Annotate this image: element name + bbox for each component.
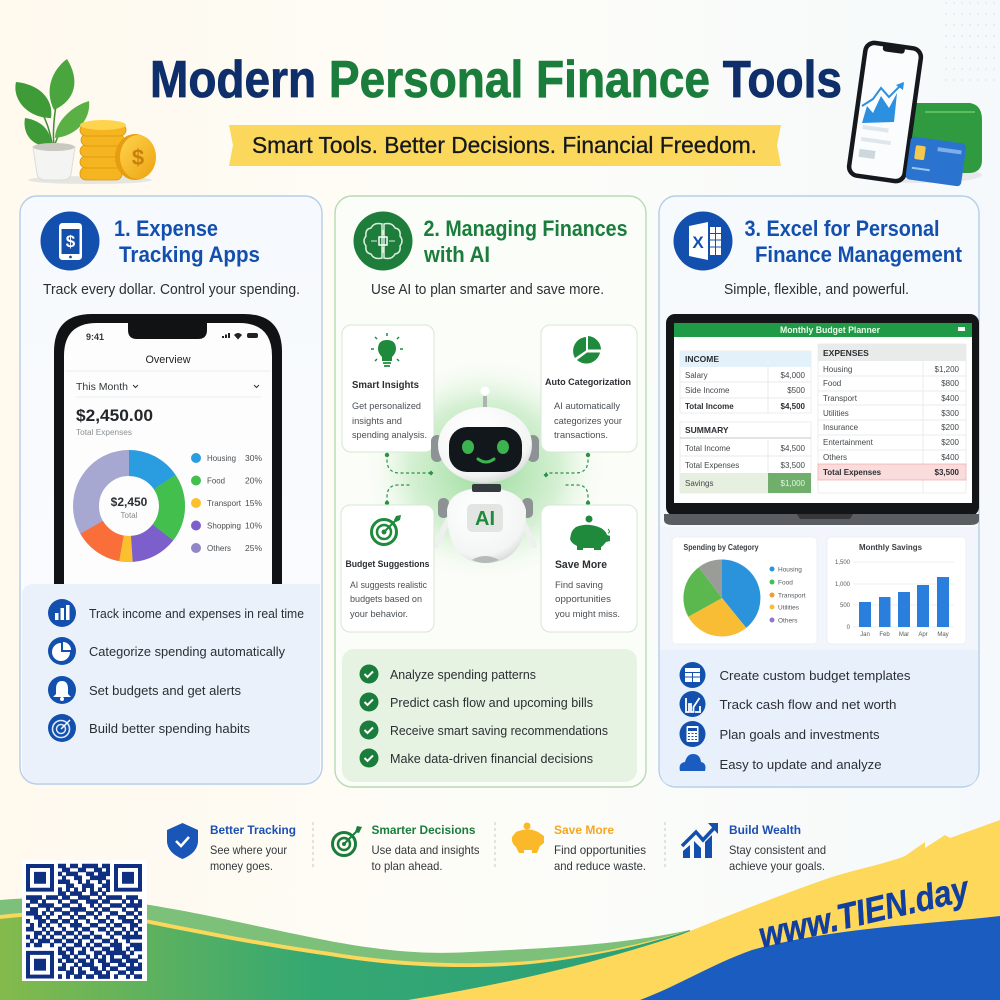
panel 2 heading: 2. Managing Finances bbox=[424, 216, 628, 241]
donut legend: Transport bbox=[207, 498, 242, 508]
benefit: build wealth: achieve your goals. bbox=[729, 859, 825, 873]
panel 1 heading: Tracking Apps bbox=[119, 242, 260, 267]
phone mockup bbox=[54, 314, 282, 584]
panel 1 feature list bbox=[22, 584, 320, 783]
phone mockup: Total Expenses bbox=[76, 428, 132, 437]
benefit: save more bbox=[512, 822, 646, 873]
expenses table: $1,200 bbox=[935, 365, 960, 374]
panel 1 feature list: Categorize spending automatically bbox=[89, 644, 285, 659]
panel 3 feature list: Track cash flow and net worth bbox=[720, 697, 896, 712]
panel 2: managing finances with AI bbox=[335, 196, 646, 787]
card: budget suggestions: Budget Suggestions bbox=[346, 559, 430, 570]
benefit: smarter decisions: to plan ahead. bbox=[372, 859, 442, 873]
icon: light bulb bbox=[371, 333, 403, 366]
benefit: better tracking: money goes. bbox=[210, 859, 273, 873]
icon: table bbox=[680, 662, 706, 688]
panel 2 feature list: Predict cash flow and upcoming bills bbox=[390, 696, 593, 710]
bar chart card: monthly savings: Jan bbox=[860, 632, 870, 638]
card: budget suggestions bbox=[341, 505, 434, 632]
card: save more bbox=[541, 505, 637, 632]
panel 2 feature list: Receive smart saving recommendations bbox=[390, 724, 608, 738]
robot bbox=[431, 386, 539, 563]
illustration: plant and coins bbox=[15, 59, 156, 184]
phone mockup: $2,450.00 bbox=[76, 406, 153, 425]
income table: $4,000 bbox=[781, 371, 806, 380]
illustration: phone, wallet and card bbox=[848, 42, 982, 187]
income table: $500 bbox=[787, 386, 806, 395]
panel 1 subtitle: Track every dollar. Control your spending. bbox=[43, 282, 300, 298]
card: auto categorization: categorizes your bbox=[554, 416, 622, 427]
bar chart card: monthly savings: 0 bbox=[847, 625, 851, 631]
donut legend: Housing bbox=[207, 453, 236, 463]
icon: target bbox=[332, 826, 362, 856]
panel 1 feature list: Set budgets and get alerts bbox=[89, 683, 241, 698]
donut legend: Shopping bbox=[207, 520, 241, 530]
icon: bar chart bbox=[48, 599, 76, 627]
benefit: save more: Save More bbox=[554, 823, 614, 837]
expenses table: $200 bbox=[941, 423, 960, 432]
card: smart insights bbox=[342, 325, 434, 452]
card: budget suggestions: your behavior. bbox=[350, 609, 408, 620]
panel 2 feature list bbox=[342, 649, 637, 782]
icon: pie chart bbox=[573, 336, 601, 364]
phone mockup: Overview bbox=[146, 354, 191, 366]
donut chart bbox=[86, 463, 172, 549]
summary table: SUMMARY bbox=[685, 425, 729, 435]
panel 1 feature list: Build better spending habits bbox=[89, 721, 250, 736]
website url: www.TIEN.day bbox=[755, 867, 974, 956]
expenses table: Housing bbox=[823, 365, 852, 374]
income table: Salary bbox=[685, 371, 708, 380]
benefit: save more: and reduce waste. bbox=[554, 859, 646, 873]
pie chart card: spending by category bbox=[672, 537, 817, 644]
bar chart card: monthly savings: Apr bbox=[918, 632, 928, 638]
icon: shield bbox=[167, 823, 198, 859]
panel 2 icon: AI brain bbox=[354, 212, 412, 270]
panel 1 icon: phone with dollar bbox=[40, 212, 100, 270]
expenses table bbox=[818, 344, 966, 493]
donut legend: 20% bbox=[245, 476, 262, 486]
benefit: better tracking bbox=[167, 823, 296, 873]
summary table: Total Expenses bbox=[685, 461, 739, 470]
laptop with budget spreadsheet bbox=[664, 314, 979, 525]
expenses table: Food bbox=[823, 379, 841, 388]
card: save more: opportunities bbox=[555, 594, 611, 605]
expenses table: $800 bbox=[941, 379, 960, 388]
income table: Total Income bbox=[685, 402, 734, 411]
summary table: Savings bbox=[685, 479, 713, 488]
panel 3 heading bbox=[744, 216, 963, 267]
benefit: build wealth: Build Wealth bbox=[729, 823, 801, 837]
icon: target bbox=[48, 714, 76, 742]
panel 2 feature list: Analyze spending patterns bbox=[390, 668, 536, 682]
income table: $4,500 bbox=[781, 402, 806, 411]
panel 3: excel for personal finance bbox=[659, 196, 979, 787]
panel 2 heading: with AI bbox=[423, 242, 490, 267]
expenses table: EXPENSES bbox=[823, 348, 869, 358]
expenses table: Entertainment bbox=[823, 438, 874, 447]
bar chart card: monthly savings: Monthly Savings bbox=[859, 542, 922, 552]
icon: piggy bank bbox=[512, 822, 544, 853]
panel 3 subtitle: Simple, flexible, and powerful. bbox=[724, 282, 909, 298]
panel 1 heading bbox=[114, 216, 260, 267]
donut legend: 30% bbox=[245, 453, 262, 463]
card: save more: Find saving bbox=[555, 580, 603, 591]
bar chart card: monthly savings bbox=[827, 537, 966, 644]
panel 1: expense tracking apps bbox=[20, 196, 322, 784]
panel 1 heading: 1. Expense bbox=[114, 216, 218, 241]
expenses table: Utilities bbox=[823, 409, 849, 418]
donut legend: Food bbox=[207, 476, 225, 486]
pie chart card: spending by category: Housing bbox=[778, 566, 802, 574]
phone mockup: 9:41 bbox=[86, 332, 104, 342]
panel 3 heading: Finance Management bbox=[755, 242, 963, 267]
phone mockup: $2,450 bbox=[111, 495, 148, 509]
benefit: smarter decisions: Use data and insights bbox=[372, 843, 480, 857]
card: auto categorization: AI automatically bbox=[554, 401, 620, 412]
connector lines bbox=[385, 453, 590, 505]
summary table: $1,000 bbox=[781, 479, 806, 488]
expenses table: $400 bbox=[941, 453, 960, 462]
card: budget suggestions: budgets based on bbox=[350, 594, 422, 605]
panel 2 feature list: Make data-driven financial decisions bbox=[390, 752, 593, 766]
donut legend: 25% bbox=[245, 543, 262, 553]
card: smart insights: insights and bbox=[352, 416, 402, 427]
pie chart card: spending by category: Spending by Category bbox=[684, 543, 759, 552]
icon: pie bbox=[48, 637, 76, 665]
benefit: smarter decisions bbox=[332, 823, 480, 873]
card: smart insights: Get personalized bbox=[352, 401, 421, 412]
icon: target bbox=[372, 515, 401, 544]
expenses table: $400 bbox=[941, 394, 960, 403]
illustration: plant and coins: $ bbox=[132, 145, 144, 170]
benefit: build wealth bbox=[682, 823, 826, 873]
benefit: better tracking: Better Tracking bbox=[210, 823, 296, 837]
card: save more: Save More bbox=[555, 559, 607, 571]
QR code bbox=[22, 860, 147, 981]
bar chart card: monthly savings: Mar bbox=[899, 632, 909, 638]
phone mockup: This Month bbox=[76, 382, 128, 393]
panel 3 icon: excel bbox=[674, 212, 732, 270]
panel 2 subtitle: Use AI to plan smarter and save more. bbox=[371, 282, 604, 298]
pie chart card: spending by category: Transport bbox=[778, 592, 806, 600]
income table: Side Income bbox=[685, 386, 730, 395]
pie chart card: spending by category: Utilities bbox=[778, 604, 800, 612]
pie chart card: spending by category: Others bbox=[778, 618, 798, 624]
donut legend: 10% bbox=[245, 520, 262, 530]
summary table: $3,500 bbox=[781, 461, 806, 470]
pie chart card: spending by category: Food bbox=[778, 580, 793, 586]
summary table bbox=[680, 422, 811, 493]
expenses table: $3,500 bbox=[935, 468, 960, 477]
laptop with budget spreadsheet: Monthly Budget Planner bbox=[780, 325, 880, 336]
panel 2 heading bbox=[423, 216, 628, 267]
card: smart insights: Smart Insights bbox=[352, 380, 419, 391]
bar chart card: monthly savings: 1,000 bbox=[835, 582, 851, 588]
summary table: Total Income bbox=[685, 444, 731, 453]
panel 3 feature list bbox=[660, 650, 978, 786]
panel 3 feature list: Create custom budget templates bbox=[720, 668, 911, 683]
card: budget suggestions: AI suggests realistic bbox=[350, 580, 427, 591]
expenses table: Insurance bbox=[823, 423, 859, 432]
panel 3 icon: excel: X bbox=[692, 233, 704, 252]
card: auto categorization bbox=[541, 325, 637, 452]
donut legend bbox=[191, 453, 262, 553]
benefit: save more: Find opportunities bbox=[554, 843, 646, 857]
panel 1 feature list: Track income and expenses in real time bbox=[89, 606, 304, 621]
bar chart card: monthly savings: Feb bbox=[879, 632, 890, 638]
income table bbox=[680, 351, 811, 413]
tagline banner bbox=[229, 125, 781, 166]
phone mockup: Total bbox=[121, 511, 138, 520]
card: save more: you might miss. bbox=[555, 609, 620, 620]
panel 3 feature list: Plan goals and investments bbox=[720, 727, 880, 742]
card: auto categorization: Auto Categorization bbox=[545, 377, 631, 388]
panel 1 icon: phone with dollar: $ bbox=[66, 232, 76, 251]
icon: piggy bank bbox=[570, 516, 610, 550]
panel 3 feature list: Easy to update and analyze bbox=[720, 757, 882, 772]
donut legend: Others bbox=[207, 543, 231, 553]
bottom wave background bbox=[0, 820, 1000, 1000]
bar chart card: monthly savings: 500 bbox=[840, 603, 851, 609]
bar chart card: monthly savings: 1,500 bbox=[835, 560, 851, 566]
bar chart card: monthly savings: May bbox=[937, 632, 949, 638]
icon: cloud bbox=[680, 754, 706, 771]
title: Modern Personal Finance Tools bbox=[150, 51, 842, 109]
expenses table: Transport bbox=[823, 394, 858, 403]
icon: growth chart bbox=[682, 823, 718, 858]
expenses table: $300 bbox=[941, 409, 960, 418]
expenses table: Others bbox=[823, 453, 847, 462]
panel 3 heading: 3. Excel for Personal bbox=[744, 216, 940, 241]
benefit: build wealth: Stay consistent and bbox=[729, 843, 826, 857]
expenses table: $200 bbox=[941, 438, 960, 447]
icon: cash flow chart bbox=[680, 691, 706, 717]
card: auto categorization: transactions. bbox=[554, 430, 608, 441]
card: smart insights: spending analysis. bbox=[352, 430, 427, 441]
donut legend: 15% bbox=[245, 498, 262, 508]
robot glow bbox=[360, 355, 610, 585]
benefit: better tracking: See where your bbox=[210, 843, 287, 857]
benefit: smarter decisions: Smarter Decisions bbox=[372, 823, 476, 837]
tagline banner: Smart Tools. Better Decisions. Financial Freedom. bbox=[252, 132, 757, 158]
icon: calculator bbox=[680, 721, 706, 747]
summary table: $4,500 bbox=[781, 444, 806, 453]
expenses table: Total Expenses bbox=[823, 468, 882, 477]
robot: AI bbox=[475, 508, 495, 530]
income table: INCOME bbox=[685, 354, 719, 364]
icon: bell bbox=[48, 676, 76, 704]
